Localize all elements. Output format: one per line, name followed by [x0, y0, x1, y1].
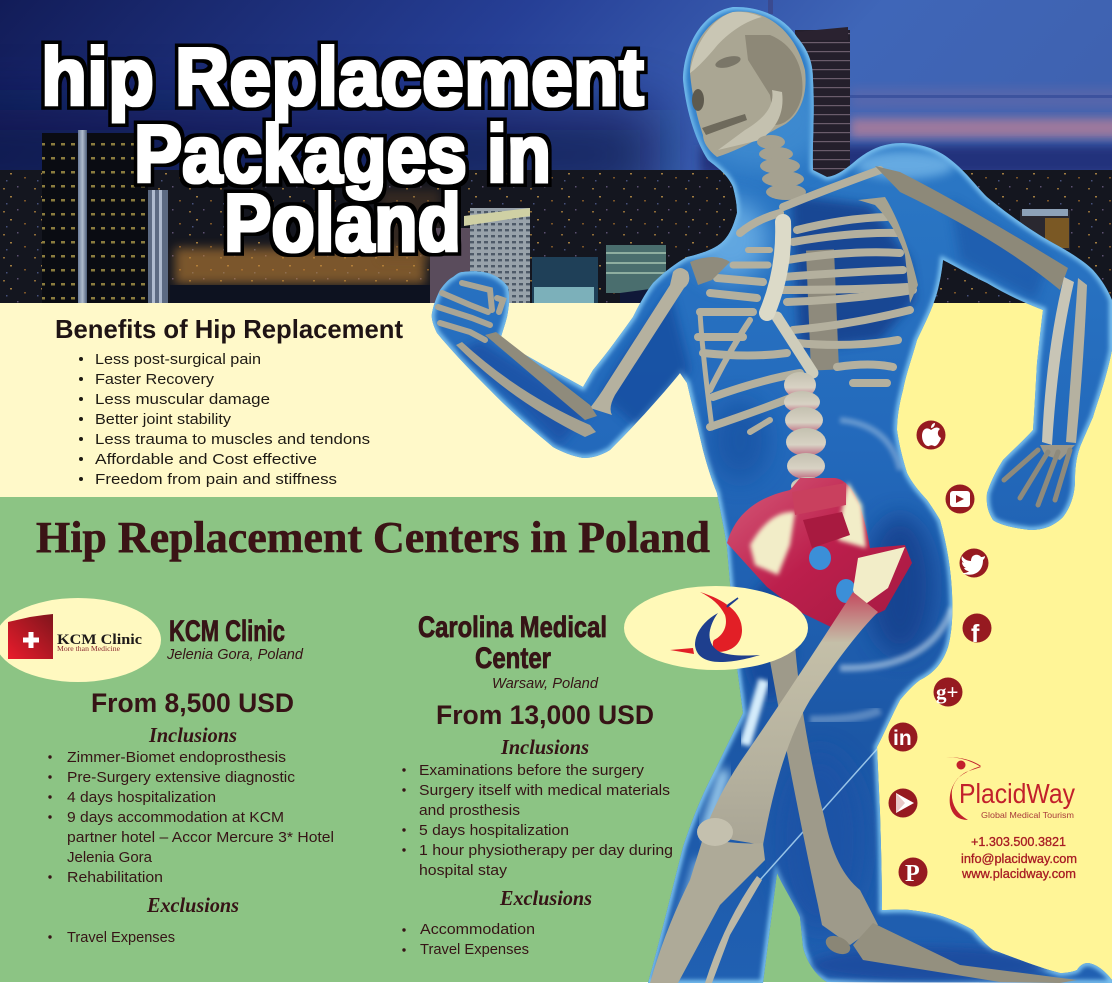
heading: centers: Hip Replacement Centers in Poland — [36, 513, 710, 562]
KCM inclusions list — [48, 749, 334, 886]
figure: front leg femur — [703, 592, 878, 845]
figure: right scapula — [858, 197, 918, 303]
icon: facebook: f — [971, 620, 980, 648]
icon: youtube — [946, 484, 974, 514]
figure: patella back knee — [823, 932, 853, 958]
Carolina name: Carolina Medical — [418, 611, 607, 644]
main title — [41, 32, 644, 269]
list: benefits: Affordable and Cost effective — [95, 451, 317, 468]
website: www.placidway.com — [961, 867, 1076, 881]
list: benefits: Less trauma to muscles and tendons — [95, 431, 370, 448]
KCM location: Jelenia Gora, Poland — [166, 647, 304, 663]
panel: right yellow background — [760, 303, 1112, 982]
Carolina location: Warsaw, Poland — [492, 676, 599, 692]
icon: google plus: g+ — [936, 680, 958, 704]
logo: KCM clinic ellipse — [0, 598, 161, 682]
list: benefits — [79, 351, 370, 488]
Carolina inclusions list: 5 days hospitalization — [419, 822, 569, 839]
panel: centers green background — [0, 497, 860, 982]
list: benefits: Less post-surgical pain — [95, 351, 261, 368]
logo: KCM clinic ellipse: More than Medicine — [57, 645, 120, 653]
KCM name: KCM Clinic — [169, 615, 285, 648]
panel: Carolina Medical Center package: Center — [475, 642, 551, 675]
figure: skull — [690, 12, 806, 157]
email: info@placidway.com — [961, 852, 1077, 866]
anatomical runner figure — [432, 7, 1112, 983]
Carolina inclusions list: hospital stay — [419, 862, 508, 879]
logo: KCM clinic ellipse: KCM Clinic — [57, 632, 142, 648]
logo: PlacidWay: Global Medical Tourism — [981, 810, 1074, 820]
Carolina exclusions list — [402, 921, 535, 958]
background: night sky — [0, 0, 1112, 303]
list: benefits: Better joint stability — [95, 411, 232, 428]
icon: play store — [888, 788, 918, 818]
icon: twitter — [960, 548, 988, 578]
KCM exclusions heading: Exclusions — [146, 893, 239, 917]
panel: KCM clinic package — [48, 615, 334, 946]
Carolina price: From 13,000 USD — [436, 700, 654, 730]
logo: Carolina ellipse — [624, 586, 808, 670]
icon: pinterest — [898, 858, 928, 887]
figure: right arm bones — [875, 166, 1087, 505]
KCM exclusions list: Travel Expenses — [67, 929, 175, 946]
Carolina inclusions list: and prosthesis — [419, 802, 520, 819]
KCM inclusions list: Jelenia Gora — [67, 849, 153, 866]
phone: +1.303.500.3821 — [971, 835, 1066, 849]
Carolina inclusions list — [402, 762, 673, 879]
Carolina exclusions list: Accommodation — [420, 921, 535, 938]
panel: yellow lower right area — [882, 497, 1112, 982]
social icons column — [888, 420, 992, 887]
icon: pinterest: P — [905, 861, 920, 887]
contact details — [961, 835, 1077, 881]
KCM inclusions list: Zimmer-Biomet endoprosthesis — [67, 749, 286, 766]
icon: linkedin: in — [893, 727, 912, 750]
title line 2: Packages in — [134, 109, 551, 200]
title line 1: hip Replacement — [41, 32, 644, 123]
icon: google plus — [934, 678, 962, 706]
KCM price: From 8,500 USD — [91, 688, 294, 718]
list: benefits: Faster Recovery — [95, 371, 215, 388]
figure: left shoulder joint — [690, 257, 730, 285]
list: benefits: Less muscular damage — [95, 391, 270, 408]
figure: ribcage — [698, 170, 913, 432]
panel: Carolina Medical Center package — [402, 611, 673, 958]
figure: lumbar spine — [784, 372, 826, 495]
Carolina inclusions list: 1 hour physiotherapy per day during — [419, 842, 673, 859]
figure: back leg femur — [768, 645, 878, 945]
Carolina inclusions heading: Inclusions — [500, 735, 589, 759]
figure: spine upper behind ribs — [820, 250, 825, 370]
figure: red pelvis — [727, 478, 912, 628]
KCM inclusions list: partner hotel – Accor Mercure 3* Hotel — [67, 829, 334, 846]
title line 3: Poland — [224, 178, 461, 269]
logo: PlacidWay: PlacidWay — [959, 778, 1075, 809]
panel: benefits cream background — [0, 303, 760, 497]
KCM inclusions heading: Inclusions — [148, 723, 237, 747]
figure: back leg tibia — [853, 923, 1077, 983]
background: city skyline with buildings — [0, 0, 1112, 303]
figure: front knee and tibia — [650, 818, 765, 983]
Carolina inclusions list: Examinations before the surgery — [419, 762, 645, 779]
figure: blue body silhouette — [432, 7, 1112, 983]
KCM inclusions list: Pre-Surgery extensive diagnostic — [67, 769, 296, 786]
KCM inclusions list: 4 days hospitalization — [67, 789, 216, 806]
list: benefits: Freedom from pain and stiffness — [95, 471, 337, 488]
icon: apple — [916, 420, 946, 450]
figure: left arm bones — [438, 268, 689, 437]
heading: benefits: Benefits of Hip Replacement — [55, 314, 403, 344]
Carolina exclusions heading: Exclusions — [499, 886, 592, 910]
Carolina exclusions list: Travel Expenses — [420, 941, 529, 958]
KCM inclusions list: Rehabilitation — [67, 869, 163, 886]
icon: linkedin — [888, 722, 918, 752]
KCM inclusions list: 9 days accommodation at KCM — [67, 809, 284, 826]
logo: PlacidWay — [946, 757, 1075, 820]
figure: neck vertebrae — [757, 135, 806, 200]
icon: facebook — [962, 614, 992, 648]
Carolina inclusions list: Surgery itself with medical materials — [419, 782, 670, 799]
